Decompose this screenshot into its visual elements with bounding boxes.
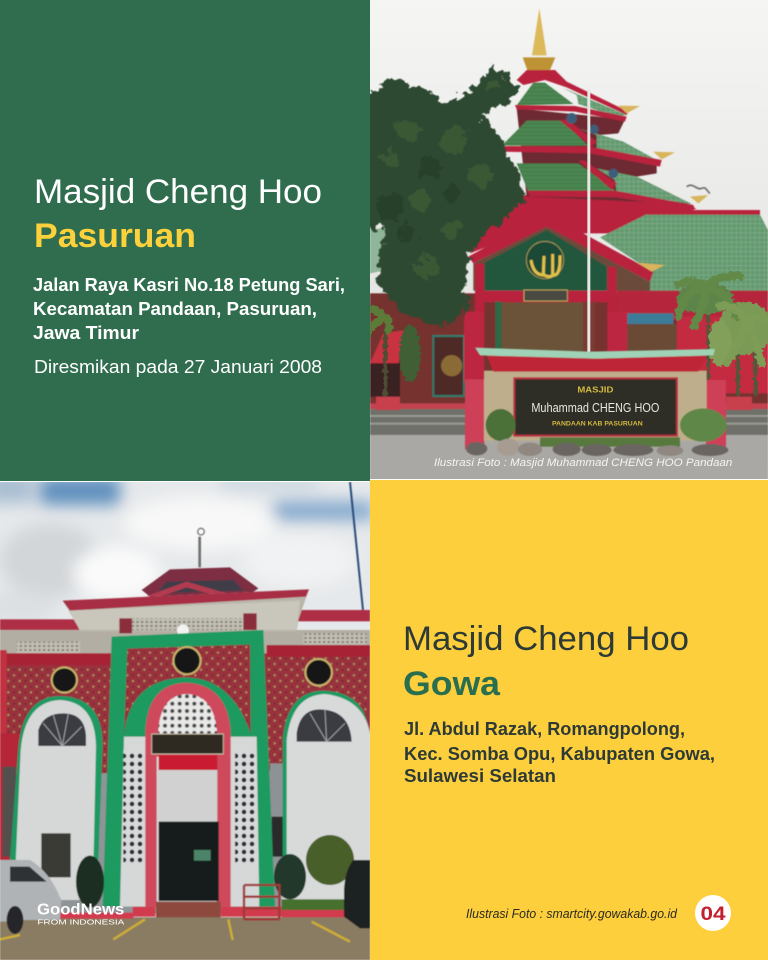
- illustration: mosque building: [0, 482, 370, 960]
- main right roof: [600, 212, 768, 291]
- heading: Masjid Cheng Hoo Pasuruan: Pasuruan: [34, 217, 196, 255]
- second tier: [502, 121, 588, 146]
- top pavilion: [142, 567, 258, 597]
- top tier: [517, 83, 573, 105]
- side roofs: [0, 619, 80, 631]
- gable backing: [473, 226, 650, 291]
- heading: Masjid Cheng Hoo Gowa: Masjid Cheng Hoo: [403, 620, 689, 658]
- sign: Masjid Muhammad Cheng Hoo: [465, 348, 728, 456]
- ground: [0, 917, 370, 960]
- heading: Masjid Cheng Hoo Pasuruan: [34, 173, 322, 255]
- address: Gowa: [404, 719, 715, 786]
- logo: GoodNews from Indonesia: GoodNews: [37, 901, 124, 918]
- main overhang: [63, 589, 309, 632]
- sign: Masjid Muhammad Cheng Hoo: MASJID: [577, 386, 614, 395]
- left arch bay: [10, 696, 103, 860]
- address: Pasuruan: Jawa Timur: [33, 323, 139, 343]
- heading: Masjid Cheng Hoo Gowa: [403, 620, 689, 703]
- flower beds: [376, 397, 752, 410]
- illustration: tree: [357, 67, 527, 327]
- shrubs: [76, 856, 104, 908]
- right arch bay: [283, 691, 369, 860]
- address: Gowa: Kec. Somba Opu, Kabupaten Gowa,: [404, 744, 715, 764]
- ground and steps: [370, 433, 768, 480]
- address: Gowa: Sulawesi Selatan: [404, 766, 556, 786]
- finial: [532, 8, 547, 55]
- front gable: [483, 230, 607, 291]
- illustration: sky and clouds: [0, 482, 370, 614]
- panel: photo of Masjid Muhammad Cheng Hoo Pandaan: [357, 0, 768, 480]
- flagpole: [587, 89, 590, 353]
- sign: Masjid Muhammad Cheng Hoo: PANDAAN KAB PASURUAN: [552, 421, 643, 428]
- photo credit: Gowa: Ilustrasi Foto : smartcity.gowakab.go.id: [466, 906, 678, 921]
- tower backing: [517, 108, 692, 204]
- address: Pasuruan: [33, 275, 345, 343]
- ornaments: [566, 113, 577, 124]
- heading: Masjid Cheng Hoo Gowa: Gowa: [403, 665, 501, 703]
- sign: Masjid Muhammad Cheng Hoo: Muhammad CHENG HOO: [531, 400, 659, 415]
- logo: GoodNews from Indonesia: FROM INDONESIA: [37, 918, 125, 927]
- address: Gowa: Jl. Abdul Razak, Romangpolong,: [404, 719, 685, 739]
- columns: [475, 263, 484, 313]
- lower wall: [370, 293, 768, 403]
- inauguration date: Diresmikan pada 27 Januari 2008: [34, 357, 322, 377]
- base and steps: [133, 907, 155, 917]
- heading: Masjid Cheng Hoo Pasuruan: Masjid Cheng Hoo: [34, 173, 322, 211]
- photo credit: Pandaan: Ilustrasi Foto : Masjid Muhammad CHENG HOO Pandaan: [434, 457, 732, 469]
- panel: Gowa info: [370, 480, 768, 960]
- middle wall: [470, 195, 697, 253]
- pole and finial: [350, 482, 364, 620]
- illustration: palms: [363, 276, 768, 397]
- silver car: [0, 860, 62, 922]
- address: Pasuruan: Jalan Raya Kasri No.18 Petung Sari,: [33, 275, 345, 295]
- logo: GoodNews from Indonesia: [37, 901, 125, 927]
- panel: Pasuruan info: [0, 0, 370, 481]
- illustration: mosque building: [370, 8, 768, 480]
- page number badge: 04: [700, 904, 726, 925]
- red rack: [244, 885, 279, 919]
- walls: [0, 653, 370, 773]
- third tier: [517, 163, 617, 192]
- panel: photo of Masjid Cheng Hoo Gowa: [0, 473, 373, 960]
- address: Pasuruan: Kecamatan Pandaan, Pasuruan,: [33, 299, 317, 319]
- vents: [52, 667, 77, 693]
- dark car: [344, 860, 370, 928]
- page number badge: [695, 895, 731, 931]
- central green frame: [103, 630, 275, 907]
